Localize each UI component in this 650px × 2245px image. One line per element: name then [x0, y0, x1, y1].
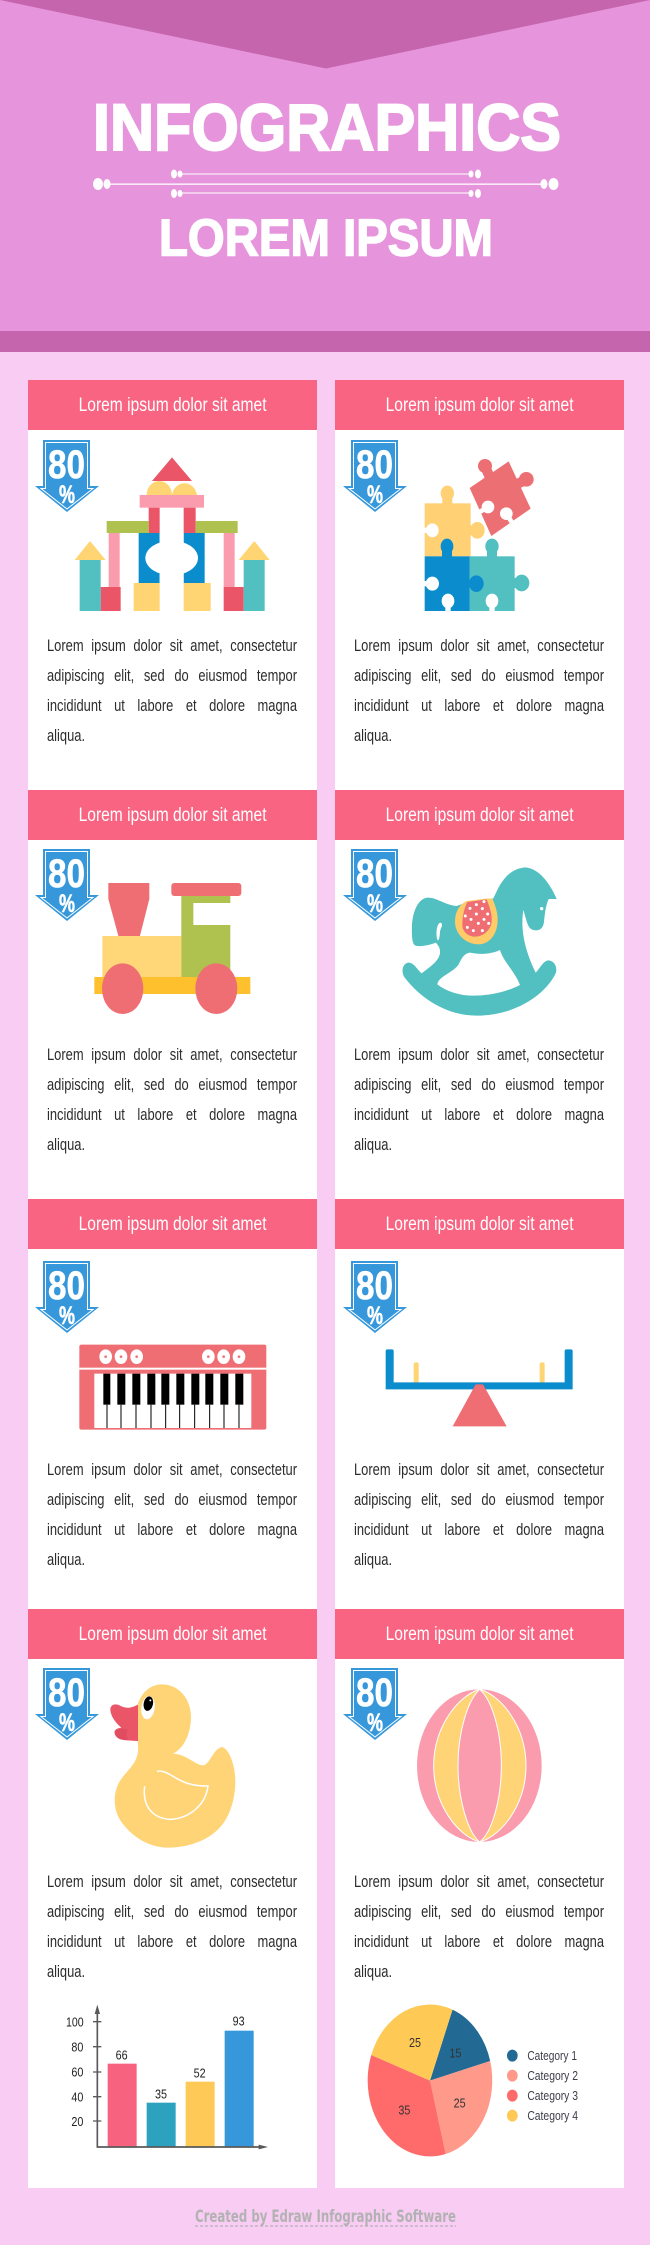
body text: incididunt ut labore et dolore magna [47, 1932, 297, 1951]
panel heading: Lorem ipsum dolor sit amet [386, 805, 573, 826]
pie chart: 25 [409, 2035, 421, 2050]
panel heading [28, 1609, 317, 1659]
badge: 80 percent arrow [343, 1261, 407, 1333]
panel heading [335, 790, 624, 840]
badge: 80 percent arrow: % [59, 1302, 75, 1330]
badge: 80 percent arrow [35, 1668, 99, 1740]
body text: Lorem ipsum dolor sit amet, consectetur [354, 636, 604, 655]
body text: incididunt ut labore et dolore magna [354, 1932, 604, 1951]
header background shapes [0, 0, 650, 352]
body text: Lorem ipsum dolor sit amet, consectetur [47, 1872, 297, 1891]
body text: adipiscing elit, sed do eiusmod tempor [47, 1490, 297, 1509]
panel heading [335, 1609, 624, 1659]
badge: 80 percent arrow: 80 [356, 443, 393, 487]
badge: 80 percent arrow [35, 440, 99, 512]
panel heading [28, 1199, 317, 1249]
body text: incididunt ut labore et dolore magna [354, 1520, 604, 1539]
body text [47, 1460, 298, 1569]
body text [354, 1872, 604, 1981]
panel: seesaw [335, 1199, 624, 1609]
pie legend: Category 2 [527, 2069, 578, 2083]
body text: Lorem ipsum dolor sit amet, consectetur [354, 1460, 604, 1479]
badge: 80 percent arrow: 80 [48, 443, 85, 487]
subtitle: LOREM IPSUM [159, 210, 493, 268]
body text: aliqua. [354, 1135, 392, 1154]
body text: adipiscing elit, sed do eiusmod tempor [354, 666, 604, 685]
bar chart [66, 2004, 268, 2150]
bar chart: 100 [66, 2015, 84, 2030]
body text: incididunt ut labore et dolore magna [47, 1105, 297, 1124]
panel: toy train [28, 790, 317, 1199]
body text [47, 1045, 298, 1154]
pie legend: Category 1 [527, 2049, 577, 2063]
body text: adipiscing elit, sed do eiusmod tempor [47, 1075, 297, 1094]
icon: toy train [94, 883, 250, 1014]
body text [47, 636, 298, 745]
bar chart: 35 [155, 2087, 167, 2102]
body text [354, 1460, 604, 1569]
panel heading: Lorem ipsum dolor sit amet [79, 1624, 266, 1645]
badge: 80 percent arrow: 80 [356, 852, 393, 896]
badge: 80 percent arrow: % [367, 890, 383, 918]
decorative title lines [93, 170, 558, 198]
panel: building blocks [28, 380, 317, 790]
badge: 80 percent arrow [343, 1668, 407, 1740]
body text: adipiscing elit, sed do eiusmod tempor [354, 1075, 604, 1094]
badge: 80 percent arrow: 80 [356, 1671, 393, 1715]
badge: 80 percent arrow [343, 440, 407, 512]
body text: incididunt ut labore et dolore magna [354, 1105, 604, 1124]
badge: 80 percent arrow: % [367, 481, 383, 509]
badge: 80 percent arrow: % [367, 1302, 383, 1330]
pie legend: Category 4 [527, 2109, 578, 2123]
panel: beach ball with pie chart [335, 1609, 624, 2188]
body text: Lorem ipsum dolor sit amet, consectetur [47, 1045, 297, 1064]
body text: aliqua. [47, 1962, 85, 1981]
body text: Lorem ipsum dolor sit amet, consectetur [354, 1872, 604, 1891]
panel heading [335, 380, 624, 430]
body text: aliqua. [354, 726, 392, 745]
badge: 80 percent arrow: % [59, 890, 75, 918]
pie chart: 25 [454, 2095, 466, 2110]
body text: aliqua. [47, 1135, 85, 1154]
body text: incididunt ut labore et dolore magna [47, 696, 297, 715]
pie chart [368, 2004, 578, 2156]
badge: 80 percent arrow: 80 [356, 1264, 393, 1308]
badge: 80 percent arrow: 80 [48, 852, 85, 896]
bar chart: 52 [194, 2066, 206, 2081]
panel heading: Lorem ipsum dolor sit amet [386, 1214, 573, 1235]
body text: aliqua. [354, 1550, 392, 1569]
icon: rubber duck [110, 1684, 236, 1848]
body text: incididunt ut labore et dolore magna [47, 1520, 297, 1539]
header banner [0, 0, 650, 352]
panel: keyboard [28, 1199, 317, 1609]
bar chart: 60 [72, 2065, 84, 2080]
panel: rocking horse [335, 790, 624, 1199]
badge: 80 percent arrow [35, 1261, 99, 1333]
bar chart: 80 [72, 2040, 84, 2055]
bar chart: 93 [233, 2014, 245, 2029]
body text: adipiscing elit, sed do eiusmod tempor [47, 1902, 297, 1921]
body text: Lorem ipsum dolor sit amet, consectetur [47, 636, 297, 655]
pie chart: 15 [449, 2045, 461, 2060]
footer credit: Created by Edraw Infographic Software [195, 2207, 456, 2227]
title: INFOGRAPHICS [93, 90, 561, 164]
body text [354, 636, 604, 745]
panel heading: Lorem ipsum dolor sit amet [79, 1214, 266, 1235]
icon: jigsaw puzzle [424, 459, 534, 611]
panel heading: Lorem ipsum dolor sit amet [79, 805, 266, 826]
badge: 80 percent arrow: % [367, 1709, 383, 1737]
icon: rocking horse [402, 867, 557, 1016]
icon: seesaw [386, 1349, 573, 1426]
badge: 80 percent arrow: % [59, 481, 75, 509]
badge: 80 percent arrow: 80 [48, 1671, 85, 1715]
pie chart: 35 [398, 2102, 410, 2117]
pie legend: Category 3 [527, 2089, 578, 2103]
panel heading [335, 1199, 624, 1249]
body text: aliqua. [354, 1962, 392, 1981]
body text: adipiscing elit, sed do eiusmod tempor [47, 666, 297, 685]
body text: adipiscing elit, sed do eiusmod tempor [354, 1490, 604, 1509]
badge: 80 percent arrow: 80 [48, 1264, 85, 1308]
badge: 80 percent arrow: % [59, 1709, 75, 1737]
icon: beach ball [417, 1690, 542, 1842]
body text: incididunt ut labore et dolore magna [354, 696, 604, 715]
panel heading [28, 380, 317, 430]
icon: toy blocks castle [74, 458, 270, 611]
badge: 80 percent arrow [343, 849, 407, 921]
panel: puzzle [335, 380, 624, 790]
panel: rubber duck with bar chart [28, 1609, 317, 2188]
bar chart: 40 [72, 2090, 84, 2105]
icon: piano keyboard [79, 1344, 266, 1430]
pie legend [507, 2049, 578, 2123]
panel heading [28, 790, 317, 840]
badge: 80 percent arrow [35, 849, 99, 921]
panel heading: Lorem ipsum dolor sit amet [386, 395, 573, 416]
body text: aliqua. [47, 1550, 85, 1569]
body text: Lorem ipsum dolor sit amet, consectetur [47, 1460, 297, 1479]
bar chart: 20 [72, 2114, 84, 2129]
panel heading: Lorem ipsum dolor sit amet [79, 395, 266, 416]
body text [47, 1872, 298, 1981]
body text [354, 1045, 604, 1154]
body text: adipiscing elit, sed do eiusmod tempor [354, 1902, 604, 1921]
bar chart: 66 [116, 2048, 128, 2063]
panel heading: Lorem ipsum dolor sit amet [386, 1624, 573, 1645]
body text: Lorem ipsum dolor sit amet, consectetur [354, 1045, 604, 1064]
body text: aliqua. [47, 726, 85, 745]
